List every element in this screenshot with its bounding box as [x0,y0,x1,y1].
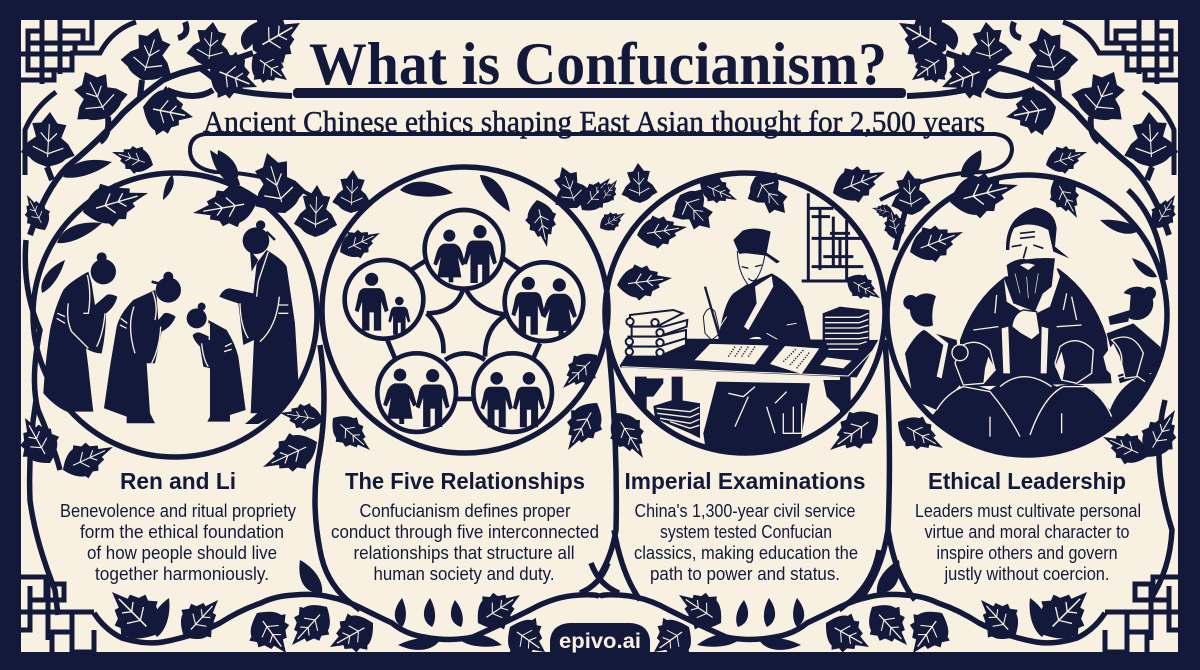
heading: Ethical Leadership: Ethical Leadership [928,468,1126,494]
lattice window [802,193,867,281]
circle ring 4 [887,175,1167,455]
body: Ren and Li: Benevolence and ritual propriety [60,501,296,521]
panel: Ren and Li [7,145,339,584]
body: The Five Relationships: human society and duty. [374,564,554,584]
panel: Ethical Leadership [879,163,1191,584]
body: Ethical Leadership: justly without coercion. [944,564,1110,584]
scholar figure [703,229,811,350]
desk [620,338,878,377]
collar and sash [1002,265,1060,373]
bottom vines and corner ornaments, right half [591,550,1178,670]
illustration: scholar at desk [620,193,878,457]
body: Ren and Li [60,501,296,584]
pair icon [383,369,450,427]
panel: Imperial Examinations [592,155,895,584]
heading: Ren and Li: Ren and Li [120,468,236,494]
watermark tab: epivo.ai: epivo.ai [559,630,641,653]
body: The Five Relationships: Confucianism defines proper [360,501,571,521]
panel: The Five Relationships [322,160,621,584]
watermark tab: epivo.ai [550,623,650,655]
five ring outlines [345,210,583,432]
right standing student [1107,287,1160,383]
elder [219,220,298,424]
surrounding leaves 4 [879,163,1191,472]
friends handshake icon [481,372,545,427]
exam papers [693,343,770,365]
Confucius head [1006,207,1069,305]
surrounding leaves 2 [322,160,621,462]
seated students foreground [932,336,1151,452]
top-right corner ornament [886,0,1179,235]
clasped hands [1012,310,1040,340]
body: Ren and Li: of how people should live [87,543,277,563]
couple icon [433,225,497,283]
left standing student [903,293,962,410]
top-left corner ornament [20,0,313,235]
illustration: people bowing [43,220,298,424]
body: Ethical Leadership [915,501,1141,584]
Confucius robe [960,268,1112,387]
surrounding leaves 3 [592,155,895,467]
bowing adult [43,252,117,412]
body: Imperial Examinations: path to power and status. [650,564,840,584]
circle ring 2 [322,167,608,453]
siblings icon [511,277,577,336]
body: The Five Relationships: conduct through five interconnected [331,522,599,542]
heading: The Five Relationships: The Five Relationships [345,468,585,494]
body: Ethical Leadership: Leaders must cultivate personal [915,501,1141,521]
circle ring 3 [605,173,885,453]
body: Imperial Examinations: system tested Confucian [660,522,832,542]
subtitle: Ancient Chinese ethics shaping East Asian thought for 2,500 years [203,104,985,139]
body: Imperial Examinations: classics, making education the [634,543,858,563]
title: What is Confucianism? [309,31,887,97]
surrounding leaves 1 [7,145,339,486]
seated robe [703,382,810,457]
body: The Five Relationships [331,501,599,584]
body: The Five Relationships: relationships that structure all [354,543,574,563]
vines between the circles [25,175,1172,615]
parent and child icon [355,273,410,335]
body: Ren and Li: together harmoniously. [95,564,269,584]
book stack right [822,306,870,340]
bottom vines and corner ornaments, left half [21,550,608,670]
page lines on book stack [825,313,868,349]
body: Imperial Examinations [634,501,858,584]
illustration: Confucius teaching students [900,207,1167,470]
bowing child [187,303,246,422]
bowing woman [104,272,181,423]
body: Ethical Leadership: virtue and moral character to [924,522,1130,542]
title underline bar [293,88,906,98]
illustration: five linked relationship circles [345,210,583,432]
circle ring 1 [33,173,317,457]
body: Ren and Li: form the ethical foundation [80,522,284,542]
linking arcs [387,258,540,399]
subtitle underline curving into vines [190,134,1012,200]
book stack under desk [653,399,700,438]
heading: Imperial Examinations: Imperial Examinations [624,468,866,494]
body: Imperial Examinations: China's 1,300-year civil service [634,501,856,521]
body: Ethical Leadership: inspire others and govern [936,543,1118,563]
scroll stack [626,310,687,357]
